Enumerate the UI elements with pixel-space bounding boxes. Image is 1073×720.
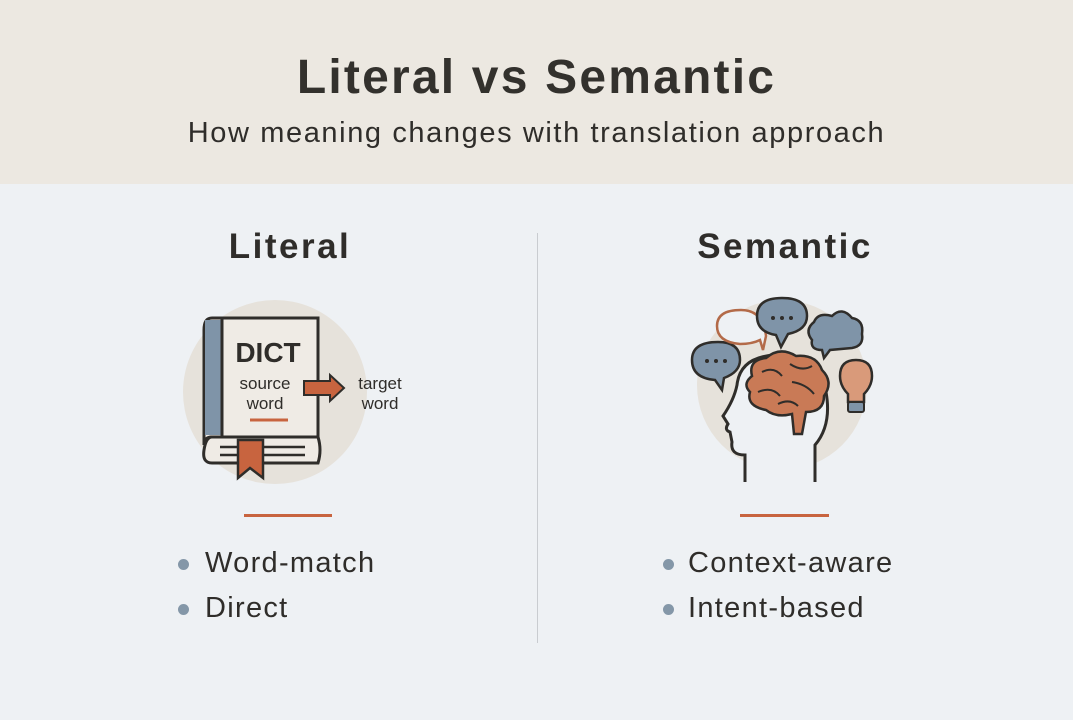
bullet list	[663, 547, 894, 624]
icon: dictionary book: DICT	[235, 337, 301, 368]
accent line	[244, 514, 332, 517]
icon: dictionary book: word	[361, 394, 398, 413]
icon: dictionary book: source	[239, 374, 291, 393]
title: Literal vs Semantic	[297, 51, 776, 104]
header band	[0, 0, 1073, 184]
divider	[537, 233, 538, 643]
bullet list: Intent-based	[688, 592, 865, 624]
panel: semantic	[663, 227, 894, 624]
icon: dictionary book	[183, 300, 402, 484]
bullet list	[178, 547, 375, 624]
panel: literal	[178, 227, 402, 624]
bullet list: Direct	[205, 592, 289, 624]
accent line	[740, 514, 829, 517]
icon: dictionary book: word	[246, 394, 283, 413]
icon: dictionary book: target	[358, 374, 402, 393]
bullet list: Word-match	[205, 547, 375, 579]
subtitle: How meaning changes with translation approach	[188, 117, 885, 149]
heading: Literal: Literal	[229, 227, 351, 266]
icon: head with brain and speech bubbles	[690, 296, 874, 482]
bullet list: Context-aware	[688, 547, 894, 579]
heading: Semantic: Semantic	[697, 227, 873, 266]
